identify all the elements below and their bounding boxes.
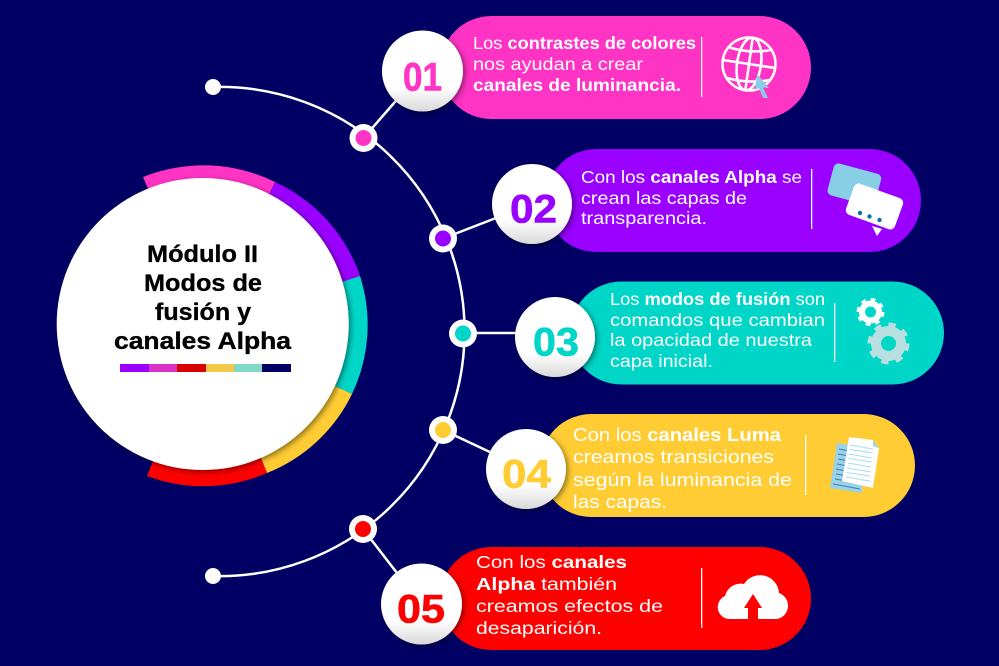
panel: item 01: Los contrastes de colores (473, 33, 696, 53)
panel: item 03: Los modos de fusión son (610, 289, 825, 309)
panel: item 02 (492, 149, 921, 252)
panel: item 01: canales de luminancia. (473, 75, 681, 95)
panel: item 01 (382, 16, 811, 119)
panel: item 01: nos ayudan a crear (473, 54, 643, 74)
timeline node 02 (429, 224, 457, 252)
title color bar (120, 364, 291, 372)
panel: item 04: las capas. (573, 491, 667, 512)
icon: globe with cursor (722, 36, 776, 98)
panel: item 03: la opacidad de nuestra (610, 330, 812, 350)
timeline start dot (205, 79, 221, 95)
central title: Modos de (144, 270, 262, 297)
panel: item 05: creamos efectos de (476, 596, 663, 616)
panel: item 03 (515, 282, 944, 384)
icon: cloud upload (718, 575, 788, 620)
central title (114, 241, 291, 355)
panel: item 02: crean las capas de (581, 188, 747, 208)
icon: chat bubbles (826, 162, 905, 236)
timeline node 04 (429, 416, 457, 444)
icon: documents (830, 437, 879, 493)
panel: item 04: Con los canales Luma (573, 424, 782, 445)
timeline node 05 (349, 515, 377, 543)
panel: item 04: según la luminancia de (573, 469, 792, 490)
panel: item 01: 01 (403, 56, 442, 100)
central title: canales Alpha (114, 328, 291, 355)
connector lines (363, 71, 555, 604)
panel: item 04: 04 (502, 452, 552, 496)
curved timeline arc (213, 87, 465, 576)
timeline node 03 (449, 320, 477, 348)
panel: item 03: capa inicial. (610, 351, 713, 371)
panel: item 05: desaparición. (476, 618, 602, 638)
central circle with colored ring (57, 165, 368, 486)
icon: gears (858, 300, 906, 362)
panel: item 02: Con los canales Alpha se (581, 167, 802, 187)
timeline node 01 (350, 124, 378, 152)
panel: item 05: Con los canales (476, 552, 627, 572)
panel: item 03: 03 (533, 320, 579, 364)
panel: item 04: creamos transiciones (573, 446, 774, 467)
panel: item 03: comandos que cambian (610, 310, 825, 330)
central title: Módulo II (147, 241, 258, 268)
panel: item 04 (486, 414, 915, 517)
panel: item 02: 02 (510, 188, 557, 232)
panel: item 05: Alpha también (476, 574, 617, 594)
central title: fusión y (155, 299, 251, 326)
panel: item 02: transparencia. (581, 208, 707, 228)
timeline end dot (205, 568, 221, 584)
panel: item 05 (381, 547, 811, 650)
panel: item 05: 05 (397, 588, 445, 632)
